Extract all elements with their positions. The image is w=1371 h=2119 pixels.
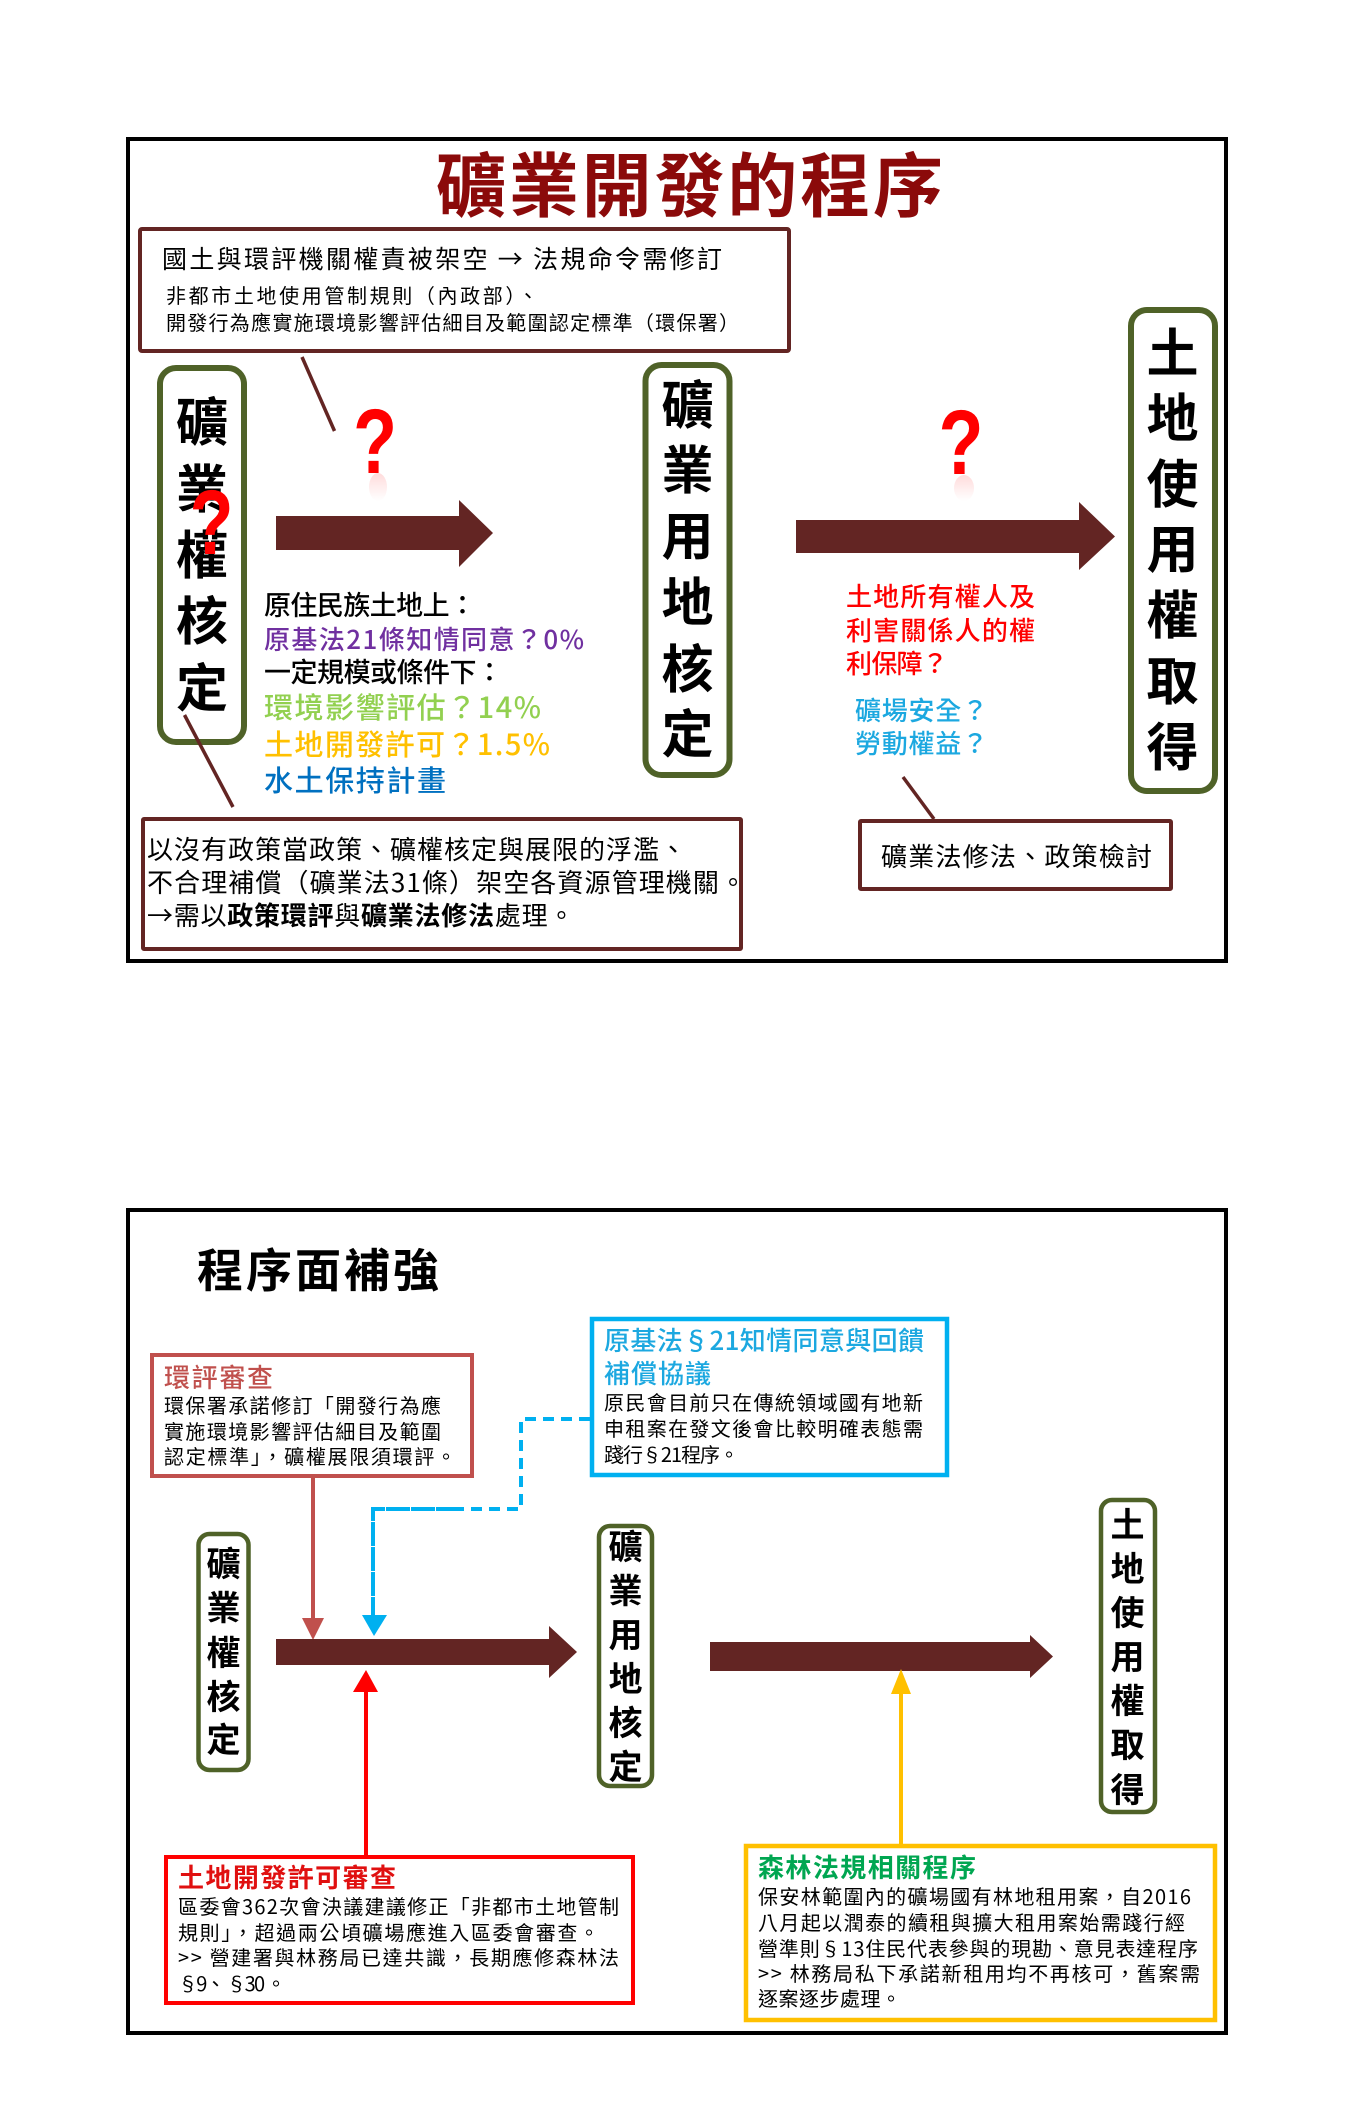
callout: land development review [166,1857,633,2003]
connector: pill to policy box [184,715,233,807]
text block: mine safety and labor: 勞動權益？ [855,724,988,761]
stage pill: land use right acquisition: 土 [1146,312,1199,387]
stage pill: mining land approval: 用 [661,495,714,570]
stage pill: mining right approval [160,368,244,742]
stage pill: mining land approval: 礦 [608,1520,642,1569]
stage pill: land use right acquisition: 取 [1110,1718,1144,1767]
stage pill: land use right acquisition: 使 [1110,1586,1144,1635]
callout: EIA review: 環評審查 [164,1358,273,1395]
stage pill: mining right approval: 業 [176,448,228,523]
stage pill: land use right acquisition: 用 [1110,1630,1144,1679]
stage pill: land use right acquisition: 權 [1110,1674,1144,1723]
stage pill: mining right approval: 定 [176,647,228,722]
callout: land development review: 區委會362次會決議建議修正「非都市土地管制 [178,1891,619,1920]
stage pill: mining right approval: 核 [206,1670,240,1719]
callout: policy EIA and mining act: 以沒有政策當政策、礦權核定與展限的浮濫、 [147,830,686,867]
stage pill: mining land approval: 核 [661,628,714,703]
callout: EIA review: 實施環境影響評估細目及範圍 [164,1416,441,1445]
stage pill: land use right acquisition [1131,310,1215,791]
callout: EIA review: 環保署承諾修訂「開發行為應 [164,1390,441,1419]
text block: land owner rights [846,577,1035,681]
text block: mine safety and labor [855,691,988,761]
stage pill: mining land approval: 定 [608,1740,642,1789]
stage pill: mining land approval: 用 [608,1608,642,1657]
stage pill: mining land approval [646,364,730,775]
stage pill: mining land approval: 業 [661,429,714,504]
callout: forest regulations [746,1846,1215,2020]
callout: EIA review [152,1355,472,1476]
text block: land owner rights: 土地所有權人及 [846,577,1035,614]
callout: indigenous consent: 申租案在發文後會比較明確表態需 [604,1413,923,1442]
callout: forest regulations: 逐案逐步處理。 [758,1983,901,2012]
stage pill: mining right approval: 礦 [206,1537,240,1586]
stage pill: land use right acquisition: 用 [1146,508,1199,583]
arrow: mining right to land approval [276,500,493,567]
stage pill: mining right approval: 權 [206,1626,240,1675]
icon: question mark above first arrow: ? [353,390,397,493]
connector: forest box to arrow [891,1669,911,1844]
text block: review conditions: 一定規模或條件下： [264,651,503,690]
connector: safety text to act box [903,777,934,819]
callout: forest regulations: 八月起以潤泰的續租與擴大租用案始需踐行經 [758,1907,1185,1936]
stage pill: mining land approval [599,1520,652,1789]
connector: upper box to first arrow [302,357,334,431]
callout: policy EIA and mining act: →需以政策環評與礦業法修法處理。 [147,896,575,933]
stage pill: mining land approval: 地 [608,1652,642,1701]
stage pill: mining land approval: 業 [608,1564,642,1613]
callout: policy EIA and mining act [143,819,746,949]
text block: review conditions [264,584,584,800]
text block: review conditions: 環境影響評估？14% [264,685,541,727]
callout: mining act amendment: 礦業法修法、政策檢討 [881,837,1152,874]
callout: forest regulations: 保安林範圍內的礦場國有林地租用案，自2016 [758,1881,1191,1910]
title: 礦業開發的程序 [436,131,943,232]
callout: indigenous consent: 補償協議 [604,1354,711,1391]
callout: indigenous consent: 原基法§21知情同意與回饋 [604,1321,924,1358]
callout: forest regulations: >> 林務局私下承諾新租用均不再核可，舊案需 [758,1958,1200,1987]
connector: land development box to arrow [353,1670,378,1855]
callout: mining act amendment [860,821,1171,889]
stage pill: land use right acquisition: 地 [1146,377,1199,452]
stage pill: mining right approval: 定 [206,1713,240,1762]
stage pill: mining land approval: 定 [661,693,714,768]
connector: FPIC box to arrow, dashed [362,1419,590,1636]
callout: indigenous consent [592,1319,947,1475]
text block: review conditions: 土地開發許可？1.5% [264,722,550,764]
arrow: land approval to use right [796,502,1115,570]
callout: land development review: 土地開發許可審查 [178,1858,396,1895]
text block: mine safety and labor: 礦場安全？ [855,691,988,728]
stage pill: land use right acquisition [1101,1498,1155,1812]
callout: land development review: §9、 §30 。 [178,1968,286,1997]
stage pill: mining right approval: 礦 [176,381,228,456]
icon: question mark above second arrow: ? [939,391,983,494]
callout: forest regulations: 營準則§13住民代表參與的現勘、意見表達程序 [758,1933,1198,1962]
stage pill: mining right approval: 權 [176,514,228,589]
callout: land development review: 規則」，超過兩公頃礦場應進入區委會審查。 [178,1917,599,1946]
stage pill: land use right acquisition: 權 [1146,574,1199,649]
callout: land development review: >> 營建署與林務局已達共識，長期應修森林法 [178,1942,619,1971]
callout: land and EIA agencies: 國土與環評機關權責被架空 → 法規命令需修訂 [162,240,722,276]
stage pill: land use right acquisition: 使 [1146,443,1199,518]
text block: review conditions: 水土保持計畫 [264,758,446,800]
text block: land owner rights: 利保障？ [846,644,948,681]
stage pill: mining right approval: 核 [176,580,228,655]
callout: indigenous consent: 原民會目前只在傳統領域國有地新 [604,1387,923,1416]
heading: 程序面補強 [197,1235,439,1301]
callout: forest regulations: 森林法規相關程序 [758,1848,976,1885]
panel: mining development procedure [128,131,1226,961]
stage pill: mining right approval: 業 [206,1581,240,1630]
callout: indigenous consent: 踐行§21程序。 [604,1439,739,1468]
stage pill: mining right approval [198,1534,248,1770]
stage pill: land use right acquisition: 取 [1146,640,1199,715]
callout: land and EIA agencies: 非都市土地使用管制規則（內政部）、 [166,280,538,309]
callout: policy EIA and mining act: 不合理補償（礦業法31條）架空各資源管理機關。 [147,863,746,900]
text block: review conditions: 原住民族土地上： [264,584,476,623]
arrow: land approval to use right [710,1635,1053,1678]
callout: EIA review: 認定標準」，礦權展限須環評。 [164,1441,456,1470]
stage pill: land use right acquisition: 得 [1146,706,1199,781]
stage pill: land use right acquisition: 得 [1110,1763,1144,1812]
stage pill: mining land approval: 地 [661,561,714,636]
panel: procedural reinforcement [128,1210,1226,2033]
stage pill: land use right acquisition: 土 [1110,1498,1144,1547]
stage pill: mining land approval: 核 [608,1696,642,1745]
callout: land and EIA agencies: 開發行為應實施環境影響評估細目及範圍認定標準（環保署） [166,307,739,336]
arrow: mining right to land approval [276,1626,577,1678]
stage pill: land use right acquisition: 地 [1110,1542,1144,1591]
icon: question mark on pill: ? [190,471,233,574]
stage pill: mining land approval: 礦 [661,364,714,439]
text block: land owner rights: 利害關係人的權 [846,611,1035,648]
callout: land and EIA agencies [140,229,789,351]
connector: EIA box to arrow [302,1478,324,1640]
text block: review conditions: 原基法21條知情同意？0% [264,620,584,657]
